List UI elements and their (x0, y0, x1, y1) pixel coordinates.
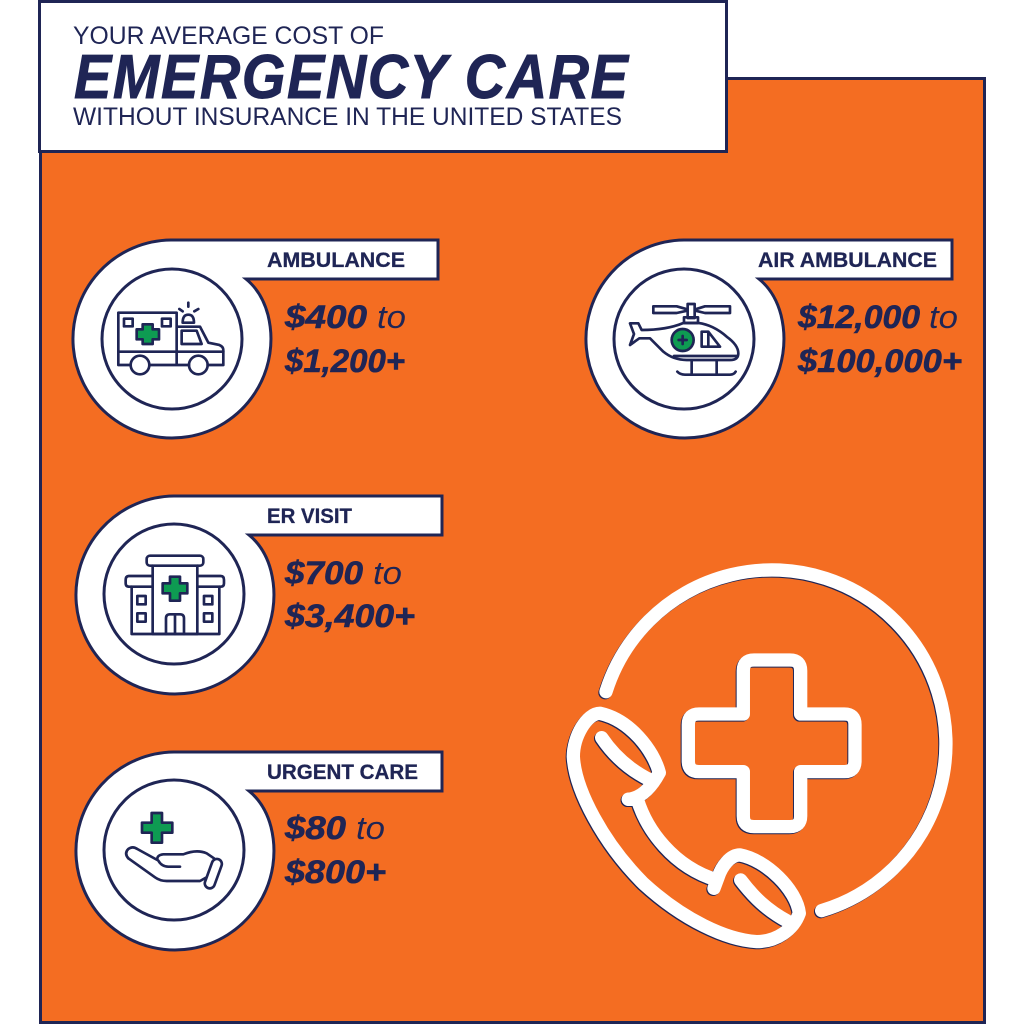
label: ER VISIT (267, 504, 352, 528)
icon: ambulance (118, 303, 223, 374)
panel: air ambulance (586, 240, 962, 438)
title line 1: YOUR AVERAGE COST OF (73, 22, 384, 50)
title line 3: WITHOUT INSURANCE IN THE UNITED STATES (73, 103, 622, 131)
price: $80 (284, 810, 346, 846)
price (797, 299, 962, 379)
label: AMBULANCE (267, 248, 405, 272)
price: to (356, 810, 385, 846)
icon: phone with medical cross in circle (572, 570, 946, 943)
price: to (929, 299, 958, 335)
label: URGENT CARE (267, 760, 418, 784)
price: $12,000 (797, 299, 920, 335)
price (284, 810, 386, 890)
badge shape (76, 496, 442, 694)
icon: hospital (126, 556, 224, 634)
price: $3,400+ (284, 598, 415, 634)
price: to (373, 555, 402, 591)
price: $700 (284, 555, 363, 591)
price (284, 299, 406, 379)
inner ring (614, 269, 754, 409)
label: AIR AMBULANCE (758, 248, 937, 272)
price: $100,000+ (797, 343, 962, 379)
badge shape (76, 752, 442, 950)
title main heading: EMERGENCY CARE (74, 42, 630, 112)
inner ring (104, 524, 244, 664)
icon: helicopter (630, 304, 738, 375)
panel: er visit (76, 496, 442, 694)
badge shape (73, 240, 438, 438)
price: $1,200+ (284, 343, 405, 379)
price: to (377, 299, 406, 335)
price: $400 (284, 299, 367, 335)
panel: title box (40, 2, 726, 152)
icon: hand with cross (126, 813, 223, 890)
price: $800+ (284, 854, 386, 890)
badge shape (586, 240, 952, 438)
panel: urgent care (76, 752, 442, 950)
inner ring (104, 780, 244, 920)
panel: ambulance (73, 240, 438, 438)
inner ring (102, 269, 242, 409)
price (284, 555, 415, 634)
